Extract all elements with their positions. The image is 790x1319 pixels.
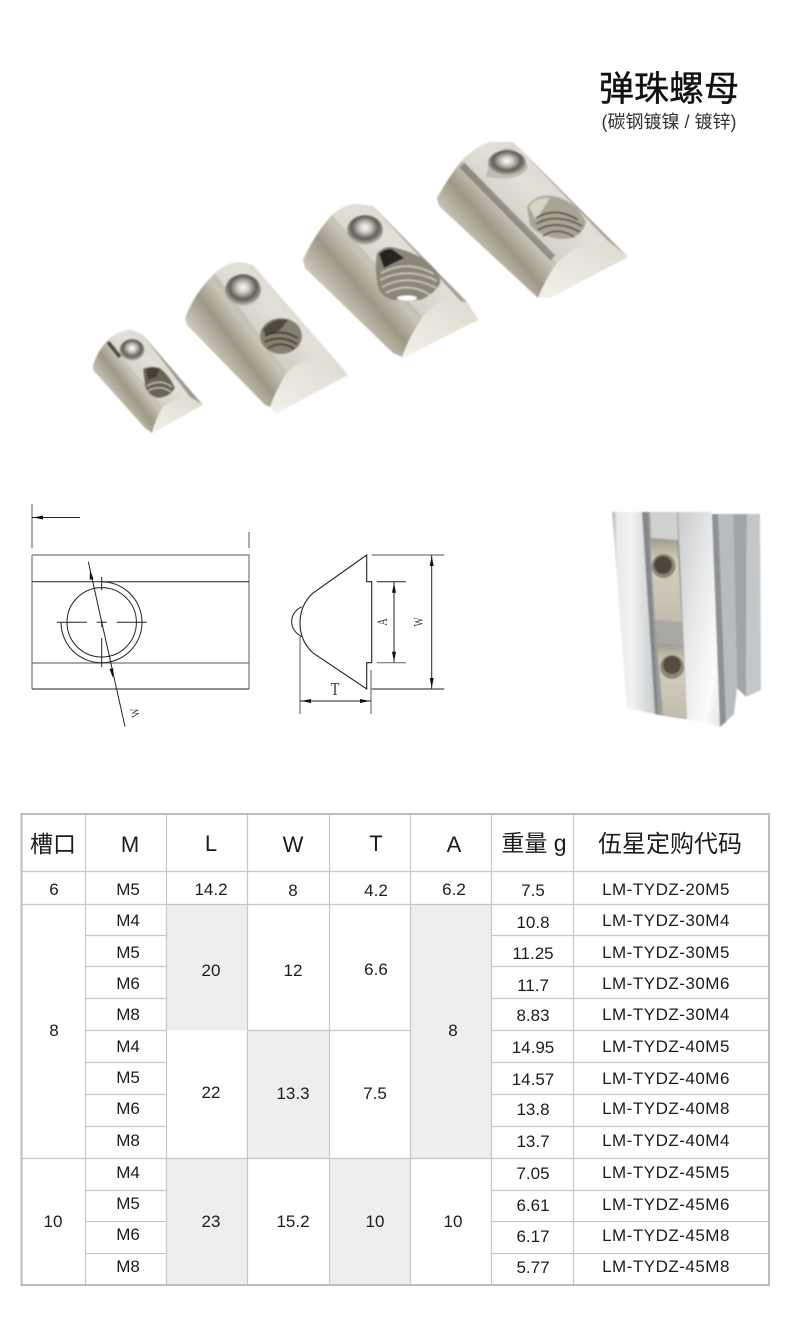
nut 1 small bbox=[93, 330, 203, 433]
M column bbox=[116, 880, 140, 1276]
weight column: 6.61 bbox=[516, 1196, 550, 1215]
weight column: 11.25 bbox=[512, 944, 554, 963]
W dimension bbox=[372, 555, 444, 689]
weight column bbox=[512, 881, 554, 1277]
nut 2 bbox=[185, 262, 348, 413]
order code column: LM-TYDZ-30M4 bbox=[602, 911, 730, 930]
A column: 8 bbox=[448, 1021, 458, 1040]
grid lines bbox=[21, 814, 769, 1285]
T column: 4.2 bbox=[364, 881, 388, 900]
M column: M5 bbox=[116, 1068, 140, 1087]
table header bbox=[30, 830, 742, 858]
table header: W bbox=[283, 832, 304, 857]
M column: M5 bbox=[116, 1194, 140, 1213]
L column: 20 bbox=[202, 961, 220, 980]
slot edge bbox=[642, 512, 659, 715]
order code column bbox=[602, 880, 730, 1276]
A column bbox=[442, 880, 466, 1231]
M column: M6 bbox=[116, 1225, 140, 1244]
T dimension: T bbox=[331, 678, 339, 699]
shaded cells bbox=[166, 904, 492, 1286]
weight column: 13.8 bbox=[516, 1100, 550, 1119]
M column: M6 bbox=[116, 1099, 140, 1118]
order code column: LM-TYDZ-45M5 bbox=[602, 1163, 730, 1182]
A column: 6.2 bbox=[442, 880, 466, 899]
slot column: 10 bbox=[44, 1212, 62, 1231]
nut lower bbox=[657, 643, 687, 718]
T column: 7.5 bbox=[363, 1084, 387, 1103]
aluminium profile left face bbox=[612, 512, 655, 714]
M column: M4 bbox=[116, 1037, 140, 1056]
weight column: 7.05 bbox=[516, 1164, 550, 1183]
profile outline bbox=[292, 555, 372, 689]
weight column: 7.5 bbox=[521, 881, 545, 900]
order code column: LM-TYDZ-40M6 bbox=[602, 1069, 730, 1088]
weight column: 10.8 bbox=[516, 913, 550, 932]
L column bbox=[194, 880, 228, 1231]
M column: M8 bbox=[116, 1257, 140, 1276]
table header: 伍星定购代码 bbox=[598, 831, 742, 858]
table header: M bbox=[121, 832, 139, 857]
table header: L bbox=[205, 831, 217, 856]
order code column: LM-TYDZ-20M5 bbox=[602, 880, 730, 899]
slot column bbox=[44, 880, 62, 1231]
title: 弹珠螺母 bbox=[599, 70, 739, 109]
M column: M6 bbox=[116, 974, 140, 993]
thread diameter dimension bbox=[88, 562, 143, 727]
T column: 6.6 bbox=[364, 960, 388, 979]
A column: 10 bbox=[444, 1212, 462, 1231]
T dimension bbox=[300, 637, 371, 714]
slot column: 8 bbox=[49, 1021, 59, 1040]
nut upper bbox=[650, 538, 682, 622]
technical drawing: top view bbox=[32, 504, 249, 727]
thread diameter dimension: W bbox=[128, 706, 143, 719]
A dimension bbox=[373, 582, 406, 663]
slot bbox=[648, 512, 687, 719]
order code column: LM-TYDZ-30M5 bbox=[602, 943, 730, 962]
W dimension: W bbox=[410, 617, 426, 627]
weight column: 5.77 bbox=[516, 1258, 550, 1277]
order code column: LM-TYDZ-40M5 bbox=[602, 1037, 730, 1056]
W column bbox=[276, 881, 310, 1231]
order code column: LM-TYDZ-45M6 bbox=[602, 1195, 730, 1214]
thread circles bbox=[57, 577, 147, 667]
length dimension bbox=[32, 504, 249, 548]
aluminium profile right faces bbox=[712, 514, 737, 727]
photo: nuts installed in aluminium profile bbox=[612, 512, 761, 727]
slot column: 6 bbox=[49, 880, 59, 899]
weight column: 8.83 bbox=[516, 1006, 550, 1025]
table header: T bbox=[369, 831, 383, 856]
table header: A bbox=[447, 832, 462, 857]
nut 4 bbox=[437, 142, 628, 298]
M column: M5 bbox=[116, 880, 140, 899]
weight column: 13.7 bbox=[516, 1132, 550, 1151]
M column: M4 bbox=[116, 1163, 140, 1182]
table header: 重量 g bbox=[501, 830, 567, 856]
specification table bbox=[21, 814, 769, 1286]
M column: M8 bbox=[116, 1005, 140, 1024]
order code column: LM-TYDZ-40M8 bbox=[602, 1099, 730, 1118]
subtitle: (碳钢镀镍 / 镀锌) bbox=[602, 112, 736, 132]
W column: 8 bbox=[288, 881, 298, 900]
L column: 23 bbox=[202, 1212, 220, 1231]
M column: M5 bbox=[116, 943, 140, 962]
M column: M8 bbox=[116, 1131, 140, 1150]
aluminium profile centre face bbox=[678, 512, 720, 727]
nut 3 bbox=[303, 204, 478, 358]
A dimension: A bbox=[373, 618, 390, 626]
weight column: 14.95 bbox=[512, 1038, 554, 1057]
L column: 14.2 bbox=[194, 880, 228, 899]
order code column: LM-TYDZ-45M8 bbox=[602, 1226, 730, 1245]
weight column: 11.7 bbox=[517, 976, 549, 995]
T column bbox=[363, 881, 388, 1231]
technical drawing: end view bbox=[292, 555, 444, 714]
product photo: four spring-ball nuts bbox=[93, 142, 628, 433]
order code column: LM-TYDZ-45M8 bbox=[602, 1257, 730, 1276]
W column: 15.2 bbox=[276, 1212, 310, 1231]
M column: M4 bbox=[116, 911, 140, 930]
nut outline bbox=[32, 555, 249, 689]
order code column: LM-TYDZ-30M6 bbox=[602, 974, 730, 993]
weight column: 14.57 bbox=[512, 1070, 554, 1089]
table header: 槽口 bbox=[30, 831, 76, 857]
W column: 13.3 bbox=[276, 1084, 310, 1103]
order code column: LM-TYDZ-30M4 bbox=[602, 1005, 730, 1024]
L column: 22 bbox=[202, 1083, 220, 1102]
order code column: LM-TYDZ-40M4 bbox=[602, 1131, 730, 1150]
W column: 12 bbox=[284, 961, 302, 980]
T column: 10 bbox=[366, 1212, 384, 1231]
weight column: 6.17 bbox=[516, 1227, 550, 1246]
